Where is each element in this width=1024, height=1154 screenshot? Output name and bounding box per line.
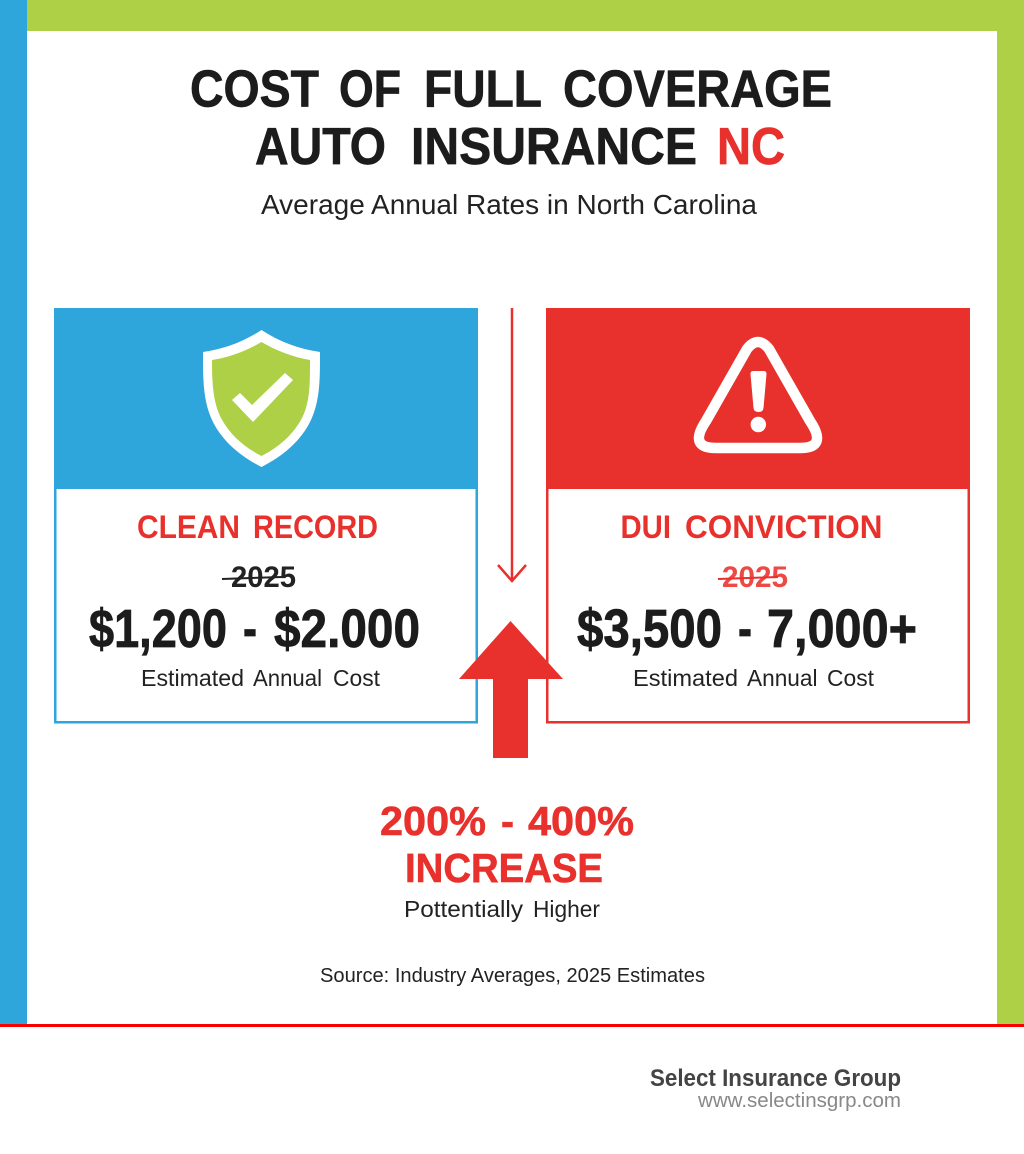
title: INSURANCE xyxy=(411,118,697,176)
icon: warning triangle xyxy=(699,342,817,448)
title: FULL xyxy=(424,60,542,118)
price range: $1,200 xyxy=(89,599,227,659)
caption: Estimated xyxy=(141,665,244,691)
heading: DUI conviction: CONVICTION xyxy=(685,509,882,545)
qualifier: Higher xyxy=(533,896,600,922)
panel: DUI conviction xyxy=(546,308,970,722)
panel frame xyxy=(547,309,969,722)
footer: brand xyxy=(650,1065,901,1112)
title xyxy=(190,60,832,176)
increase range: - xyxy=(501,798,514,844)
arrow: large up arrow xyxy=(459,621,563,758)
title: NC xyxy=(717,118,785,176)
panel frame xyxy=(55,309,477,722)
qualifier xyxy=(404,896,600,922)
arrow: thin down arrow xyxy=(498,308,526,581)
year label: 2025 xyxy=(722,561,788,594)
heading: clean record xyxy=(137,509,378,545)
price range xyxy=(577,599,917,659)
price range: $2.000 xyxy=(274,599,420,659)
increase label: INCREASE xyxy=(405,845,603,891)
title: COST xyxy=(190,60,319,118)
increase range xyxy=(380,798,634,844)
price range xyxy=(89,599,420,659)
website: www.selectinsgrp.com xyxy=(697,1090,901,1112)
icon: shield with check xyxy=(203,330,320,467)
year label: 2025 xyxy=(231,561,296,594)
caption: Annual xyxy=(747,665,818,691)
price range: 7,000+ xyxy=(767,599,917,659)
caption: Estimated xyxy=(633,665,738,691)
company name: Select Insurance Group xyxy=(650,1065,901,1092)
source note: Source: Industry Averages, 2025 Estimates xyxy=(320,965,705,987)
title: OF xyxy=(339,60,401,118)
panel: clean record xyxy=(54,308,478,722)
panel header xyxy=(546,308,970,489)
subtitle: Average Annual Rates in North Carolina xyxy=(261,189,757,220)
caption: Annual xyxy=(253,665,322,691)
heading: clean record: CLEAN xyxy=(137,509,240,545)
caption: Cost xyxy=(333,665,381,691)
price range: - xyxy=(243,599,257,659)
title: COVERAGE xyxy=(563,60,832,118)
caption: Cost xyxy=(827,665,875,691)
caption xyxy=(141,665,381,691)
increase range: 200% xyxy=(380,798,486,844)
caption xyxy=(633,665,875,691)
panel header xyxy=(54,308,478,489)
price range: - xyxy=(738,599,752,659)
heading: clean record: RECORD xyxy=(253,509,378,545)
title: AUTO xyxy=(255,118,386,176)
increase range: 400% xyxy=(528,798,634,844)
heading: DUI conviction: DUI xyxy=(620,509,671,545)
callout: percentage increase xyxy=(380,798,634,922)
price range: $3,500 xyxy=(577,599,722,659)
qualifier: Pottentially xyxy=(404,896,524,922)
